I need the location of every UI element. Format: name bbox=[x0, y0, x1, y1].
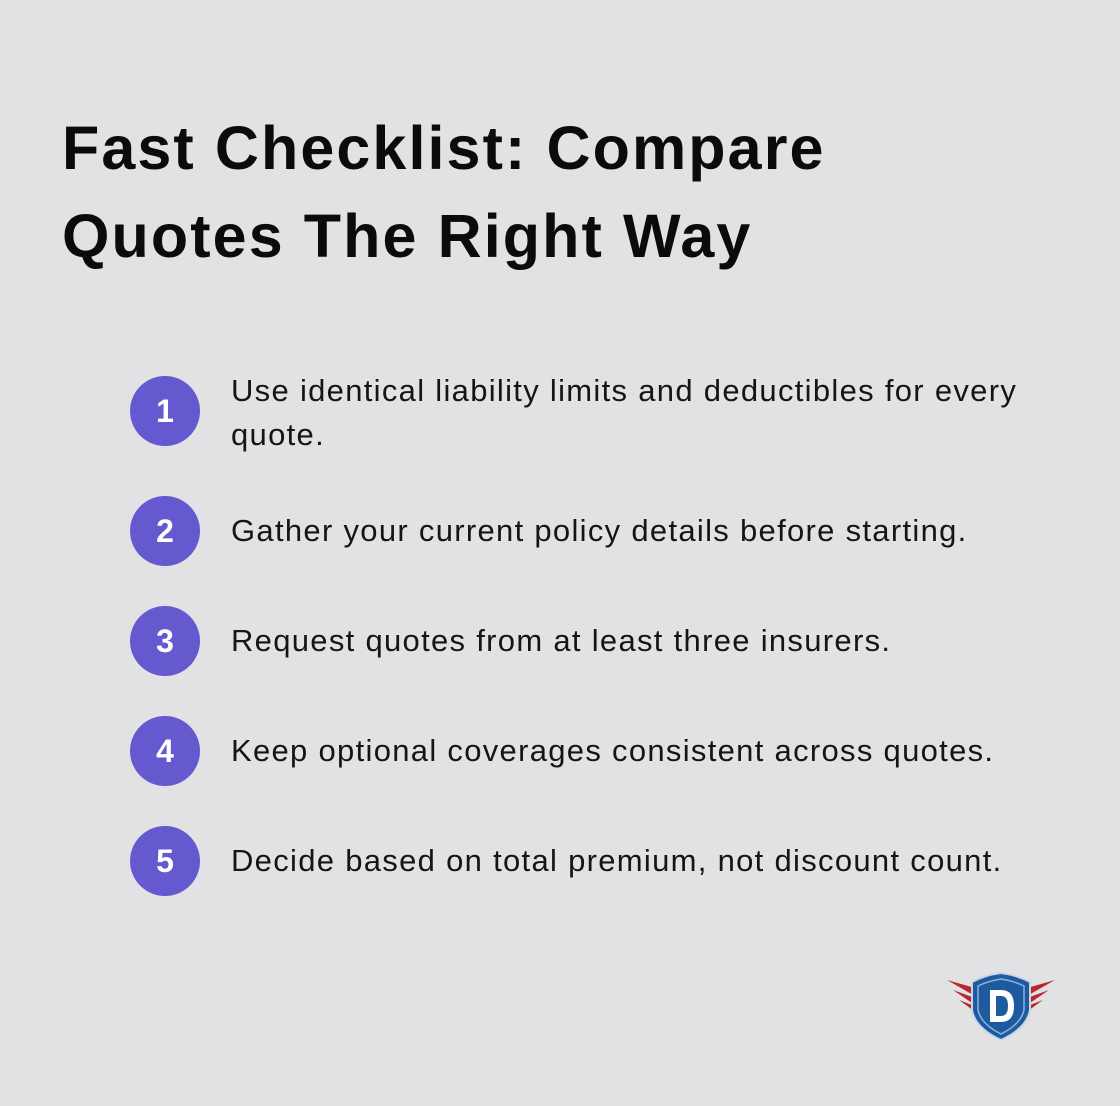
badge 5 bbox=[130, 826, 200, 896]
item 1 bbox=[130, 373, 1017, 452]
title: Fast Checklist: Compare bbox=[62, 114, 826, 182]
title: Quotes The Right Way bbox=[62, 202, 752, 270]
item 4 bbox=[130, 716, 994, 786]
badge 3: 3 bbox=[156, 623, 174, 659]
badge 1 bbox=[130, 376, 200, 446]
badge 4: 4 bbox=[156, 733, 174, 769]
icon: logo shield bbox=[947, 972, 1055, 1041]
badge 2: 2 bbox=[156, 513, 174, 549]
badge 2 bbox=[130, 496, 200, 566]
text 3: Request quotes from at least three insurers. bbox=[231, 623, 891, 658]
item 2 bbox=[130, 496, 968, 566]
text 5: Decide based on total premium, not discount count. bbox=[231, 843, 1003, 878]
text 4: Keep optional coverages consistent across quotes. bbox=[231, 733, 994, 768]
title bbox=[62, 114, 826, 270]
item 5 bbox=[130, 826, 1003, 896]
badge 4 bbox=[130, 716, 200, 786]
text 2: Gather your current policy details before starting. bbox=[231, 513, 968, 548]
item 3 bbox=[130, 606, 891, 676]
text 1: Use identical liability limits and deductibles for every quote. bbox=[231, 373, 1017, 452]
badge 3 bbox=[130, 606, 200, 676]
badge 5: 5 bbox=[156, 843, 174, 879]
badge 1: 1 bbox=[156, 393, 174, 429]
